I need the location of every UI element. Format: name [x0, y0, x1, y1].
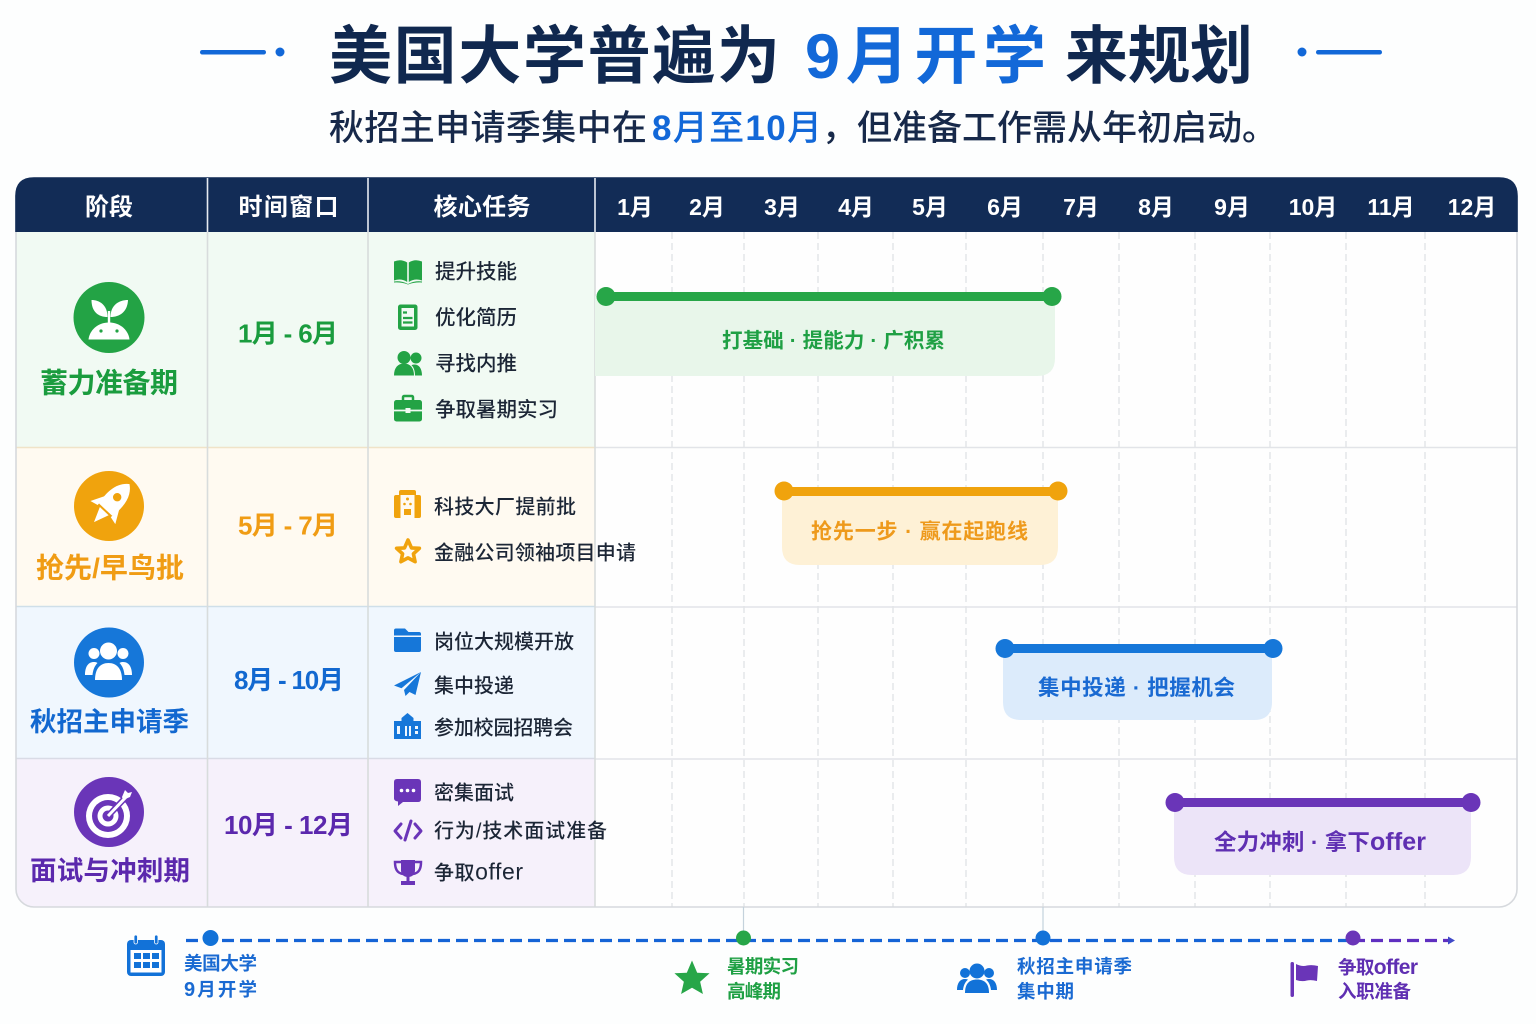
month labels: 9月 [1214, 194, 1250, 220]
time window: 10月 - 12月: 10月 - 12月 [224, 810, 353, 840]
table header [85, 193, 530, 221]
icon: star [397, 540, 419, 562]
task text: 行为/技术面试准备 [434, 820, 607, 842]
timeline connectors [744, 907, 1043, 932]
month labels: 1月 [617, 194, 653, 220]
icon: trophy [395, 860, 421, 885]
subtitle: 8月至10月 [652, 109, 822, 148]
title [329, 22, 1253, 92]
gantt grid lines [672, 232, 1425, 907]
icon: folder [394, 628, 421, 652]
bottom timeline [186, 930, 1455, 946]
task text: 集中投递 [434, 674, 514, 698]
task text: 寻找内推 [435, 352, 517, 376]
subtitle: 秋招主申请季集中在 [329, 109, 647, 148]
gantt bar: 蓄力准备期: 打基础 · 提能力 · 广积累 [722, 330, 945, 352]
month labels: 5月 [912, 194, 948, 220]
task text: 提升技能 [435, 260, 517, 284]
milestone text: 暑期实习 [727, 956, 799, 977]
gantt bar: 抢先/早鸟批: 抢先一步 · 赢在起跑线 [811, 520, 1028, 544]
table header: 阶段 [85, 193, 133, 221]
tasks: 抢先/早鸟批 [394, 490, 636, 564]
month labels [617, 194, 1496, 220]
table header band [15, 177, 1518, 232]
gantt bar: 蓄力准备期 [595, 287, 1062, 376]
milestone: 秋招主申请季集中期 [957, 956, 1132, 1002]
gantt bar: 面试与冲刺期: 全力冲刺 · 拿下offer [1214, 828, 1426, 856]
milestone: 美国大学9月开学 [127, 935, 257, 1001]
milestone text [184, 953, 257, 1001]
milestone text: 争取offer [1338, 956, 1418, 979]
panel: 抢先/早鸟批 stage [36, 471, 184, 584]
task text: 密集面试 [434, 782, 514, 804]
month labels: 7月 [1063, 194, 1099, 220]
icon: book [394, 260, 422, 284]
task text: 金融公司领袖项目申请 [434, 542, 636, 564]
month labels: 10月 [1289, 194, 1337, 220]
stage name: 蓄力准备期 [40, 368, 178, 398]
task text: 科技大厂提前批 [434, 496, 576, 518]
month labels: 8月 [1138, 194, 1174, 220]
milestone text [1338, 956, 1418, 1002]
tasks: 面试与冲刺期 [394, 779, 607, 885]
month labels: 12月 [1448, 194, 1496, 220]
milestone text: 9月开学 [184, 979, 257, 1001]
time window: 1月 - 6月: 1月 - 6月 [238, 318, 338, 348]
month labels: 2月 [689, 194, 725, 220]
panel: 面试与冲刺期 stage [30, 777, 190, 886]
icon: flag [1290, 962, 1318, 997]
icon: document [398, 304, 418, 330]
milestone text: 美国大学 [184, 953, 257, 974]
icon: campus building [394, 713, 421, 739]
title: 来规划 [1065, 22, 1253, 92]
stage name: 抢先/早鸟批 [36, 552, 184, 584]
icon: code [395, 821, 421, 840]
icon: calendar [127, 935, 165, 976]
icon: target [74, 777, 144, 847]
subtitle: ，但准备工作需从年初启动。 [822, 109, 1277, 148]
icon: star [674, 960, 710, 994]
icon: chat bubble [394, 779, 421, 806]
stage name: 面试与冲刺期 [30, 856, 190, 886]
table header: 核心任务 [434, 194, 530, 221]
icon: team [74, 628, 144, 698]
table row and column lines [16, 178, 1517, 907]
task text: 参加校园招聘会 [434, 716, 573, 740]
title: 美国大学普遍为 [329, 22, 780, 92]
milestone text [1017, 956, 1132, 1002]
task text [434, 630, 574, 740]
gantt bar: 面试与冲刺期 [1166, 793, 1480, 875]
title: 9月开学 [805, 22, 1046, 92]
schedule table background [17, 232, 594, 906]
task text [434, 782, 607, 884]
milestone: 暑期实习高峰期 [674, 956, 799, 1002]
icon: sprout [74, 282, 144, 353]
table header: 时间窗口 [238, 194, 338, 221]
month labels: 11月 [1367, 194, 1415, 220]
milestone text [727, 956, 799, 1002]
time window: 5月 - 7月: 5月 - 7月 [238, 510, 338, 540]
month labels: 6月 [987, 194, 1023, 220]
task text [434, 496, 636, 564]
task text [435, 260, 558, 422]
task text: 岗位大规模开放 [434, 630, 574, 654]
icon: people [394, 351, 422, 376]
tasks: 蓄力准备期 [394, 260, 558, 422]
task text: 优化简历 [435, 306, 517, 330]
month labels: 3月 [764, 194, 800, 220]
gantt bar: 抢先/早鸟批 [774, 482, 1068, 565]
task text: 争取暑期实习 [435, 398, 558, 422]
icon: briefcase [394, 396, 422, 422]
title decoration right [1298, 48, 1382, 56]
milestone text: 入职准备 [1338, 981, 1411, 1002]
gantt bar: 秋招主申请季: 集中投递 · 把握机会 [1038, 676, 1235, 700]
icon: office building [394, 490, 421, 518]
month labels: 4月 [838, 194, 874, 220]
milestone text: 秋招主申请季 [1017, 956, 1132, 977]
icon: rocket [74, 471, 144, 541]
stage name: 秋招主申请季 [30, 707, 189, 737]
task text: 争取offer [434, 858, 523, 884]
title decoration left [200, 48, 284, 56]
panel: 蓄力准备期 stage [40, 282, 178, 398]
subtitle [329, 109, 1277, 148]
gantt bar: 秋招主申请季 [996, 639, 1282, 720]
icon: people [957, 964, 997, 993]
tasks: 秋招主申请季 [394, 628, 574, 740]
icon: paper plane [394, 672, 421, 696]
milestone text: 高峰期 [727, 981, 781, 1002]
time window: 8月 - 10月: 8月 - 10月 [234, 665, 344, 695]
panel: 秋招主申请季 stage [30, 628, 189, 737]
milestone text: 集中期 [1017, 981, 1074, 1002]
milestone: 争取offer入职准备 [1290, 956, 1418, 1002]
